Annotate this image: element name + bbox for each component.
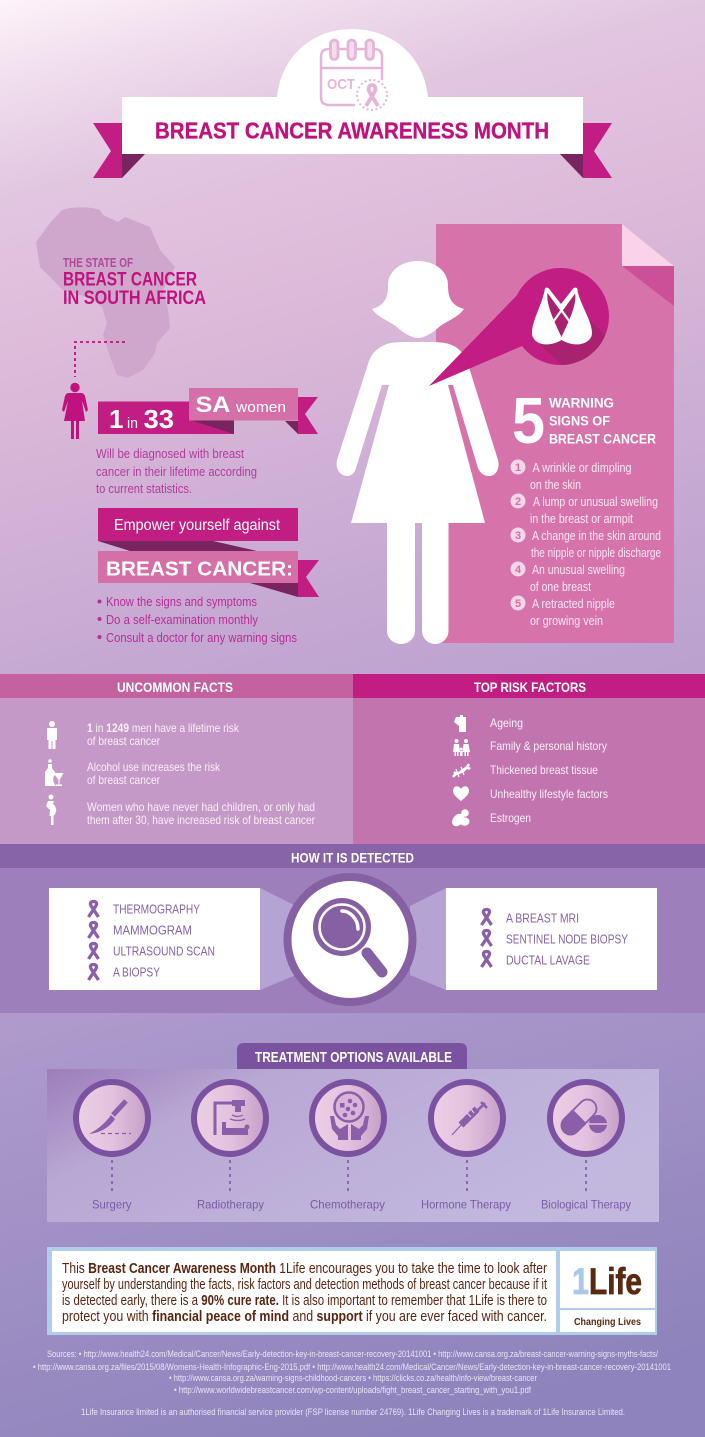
text: alcohol risk: Alcohol use increases the risk bbox=[87, 760, 221, 774]
text: diagnosis statistic bbox=[96, 446, 257, 496]
list: warning signs: or growing vein bbox=[530, 613, 603, 628]
text: message: is detected early, there is a 90% cure rate. It is also important to remember that 1Life is there to bbox=[62, 1293, 547, 1309]
ribbon: empower yourself bbox=[98, 508, 298, 551]
text: ageing: Ageing bbox=[490, 716, 523, 730]
treatment: biological therapy: Biological Therapy bbox=[541, 1198, 631, 1212]
heading: state of breast cancer bbox=[63, 255, 206, 309]
text: men risk bbox=[87, 721, 240, 748]
text: lifestyle: Unhealthy lifestyle factors bbox=[490, 787, 608, 801]
card: detection methods right bbox=[446, 888, 657, 990]
text: children risk: them after 30, have increased risk of breast cancer bbox=[87, 813, 315, 827]
text: sources: • http://www.cansa.org.za/warning-signs-childhood-cancers • https://clicks.co.za/health/info-view/breast-cancer bbox=[169, 1373, 537, 1383]
list: empower bullets: Consult a doctor for any warning signs bbox=[106, 630, 297, 645]
header banner bbox=[93, 29, 612, 178]
text: family history: Family & personal history bbox=[490, 739, 607, 753]
list: warning signs: in the breast or armpit bbox=[530, 511, 633, 526]
ribbon: breast cancer: BREAST CANCER: bbox=[106, 558, 293, 580]
list: warning signs: A retracted nipple bbox=[532, 596, 615, 611]
heading: state of breast cancer: IN SOUTH AFRICA bbox=[63, 288, 206, 309]
panel: how it is detected bbox=[0, 844, 705, 1013]
treatment: chemotherapy bbox=[310, 1082, 385, 1212]
card: detection methods right: A BREAST MRI bbox=[506, 910, 579, 926]
card: detection methods left bbox=[49, 888, 260, 990]
icon: man bbox=[47, 721, 57, 749]
right ribbon tail bbox=[560, 123, 612, 178]
list: empower bullets bbox=[98, 594, 297, 645]
ribbon: breast cancer bbox=[98, 551, 319, 597]
ribbon: 1 in 33 SA women bbox=[98, 388, 318, 434]
list: empower bullets: Know the signs and symptoms bbox=[106, 594, 257, 609]
panel: treatment options bbox=[47, 1043, 659, 1222]
text: message: This Breast Cancer Awareness Month 1Life encourages you to take the time to look after bbox=[62, 1261, 547, 1277]
text: diagnosis statistic: cancer in their lifetime according bbox=[96, 464, 257, 479]
card: detection methods left: MAMMOGRAM bbox=[113, 922, 192, 938]
logo: 1Life: 1 bbox=[572, 1261, 589, 1302]
treatment: surgery: Surgery bbox=[92, 1198, 132, 1212]
list: warning signs: 2 bbox=[515, 496, 521, 508]
list: warning signs: of one breast bbox=[530, 579, 591, 594]
heading: 5 warning signs: 5 bbox=[512, 384, 545, 457]
list: warning signs: 1 bbox=[515, 462, 521, 474]
list: warning signs: 4 bbox=[515, 564, 522, 576]
logo tagline: Changing Lives bbox=[574, 1317, 641, 1328]
list: warning signs: A change in the skin around bbox=[532, 528, 661, 543]
card: detection methods left: A BIOPSY bbox=[113, 964, 160, 980]
title: BREAST CANCER AWARENESS MONTH bbox=[155, 118, 549, 144]
card: detection methods left: ULTRASOUND SCAN bbox=[113, 944, 215, 958]
text: men risk: 1 in 1249 men have a lifetime risk bbox=[87, 721, 240, 735]
icon: magnifying glass bbox=[288, 877, 412, 1002]
icon: heart bbox=[453, 786, 469, 801]
list: warning signs: on the skin bbox=[530, 477, 581, 492]
text: diagnosis statistic: to current statistics. bbox=[96, 481, 192, 496]
ribbon: 1 in 33 SA women: SA bbox=[196, 392, 231, 417]
card: detection methods left: THERMOGRAPHY bbox=[113, 902, 200, 916]
connector wedges bbox=[260, 888, 296, 990]
heading: state of breast cancer: BREAST CANCER bbox=[63, 270, 197, 290]
treatment: biological therapy bbox=[541, 1082, 631, 1212]
ribbon: 1 in 33 SA women: in bbox=[127, 415, 138, 432]
callout: breast icon bubble bbox=[429, 268, 609, 386]
heading: uncommon facts: UNCOMMON FACTS bbox=[117, 679, 233, 695]
icon: alcohol bbox=[45, 759, 64, 786]
heading: 5 warning signs: SIGNS OF bbox=[549, 412, 610, 428]
text: men risk: of breast cancer bbox=[87, 734, 160, 748]
icon: pills bbox=[450, 809, 470, 829]
panel: top risk factors bbox=[353, 674, 705, 844]
treatment: radiotherapy bbox=[194, 1082, 266, 1212]
logo: 1Life: Life bbox=[589, 1261, 642, 1302]
text: diagnosis statistic: Will be diagnosed with breast bbox=[96, 446, 244, 461]
icon: pregnant woman bbox=[46, 794, 56, 825]
heading: 5 warning signs bbox=[512, 384, 656, 457]
text: sources bbox=[33, 1349, 671, 1395]
white dome and banner bbox=[122, 29, 583, 154]
list: warning signs: An unusual swelling bbox=[532, 562, 625, 577]
heading tab: treatment options: TREATMENT OPTIONS AVAILABLE bbox=[255, 1050, 452, 1066]
list: warning signs bbox=[510, 460, 661, 628]
figure: woman silhouette bbox=[337, 261, 499, 644]
list: warning signs: A wrinkle or dimpling bbox=[532, 460, 632, 475]
list: warning signs: 5 bbox=[515, 598, 521, 610]
map of Africa bbox=[36, 207, 175, 378]
dotted connector bbox=[75, 342, 125, 377]
icon: october calendar bbox=[321, 40, 387, 110]
icon: dna bbox=[453, 764, 470, 777]
text: children risk bbox=[87, 800, 315, 827]
heading: state of breast cancer: THE STATE OF bbox=[63, 255, 133, 270]
list: warning signs: 3 bbox=[515, 530, 521, 542]
card: detection methods right: DUCTAL LAVAGE bbox=[506, 952, 590, 968]
icon: october calendar: OCT bbox=[327, 76, 355, 93]
heading: 5 warning signs: WARNING bbox=[549, 394, 614, 410]
treatment: radiotherapy: Radiotherapy bbox=[197, 1198, 264, 1212]
text: thickened tissue: Thickened breast tissue bbox=[490, 763, 598, 777]
left ribbon tail bbox=[93, 123, 145, 178]
panel: warning signs page bbox=[436, 224, 674, 643]
heading tab: treatment options bbox=[237, 1043, 467, 1069]
panel: 1Life message bbox=[47, 1247, 657, 1335]
icon: woman bbox=[62, 383, 88, 439]
ribbon: 1 in 33 SA women: 1 bbox=[109, 404, 123, 434]
list: empower bullets: Do a self-examination monthly bbox=[106, 612, 258, 627]
text: alcohol risk: of breast cancer bbox=[87, 773, 160, 787]
icon: family bbox=[453, 739, 470, 756]
treatment: chemotherapy: Chemotherapy bbox=[310, 1198, 385, 1212]
text: estrogen: Estrogen bbox=[490, 811, 531, 825]
panel: uncommon facts bbox=[0, 674, 353, 844]
heading: top risk factors: TOP RISK FACTORS bbox=[474, 679, 586, 695]
text: alcohol risk bbox=[87, 760, 221, 787]
list: warning signs: A lump or unusual swelling bbox=[533, 494, 658, 509]
treatment: hormone therapy: Hormone Therapy bbox=[421, 1198, 511, 1212]
text: message: yourself by understanding the facts, risk factors and detection methods of breast cancer because if it bbox=[62, 1277, 547, 1293]
ribbon: 1 in 33 SA women: 33 bbox=[144, 404, 174, 434]
text: sources: • http://www.worldwidebreastcancer.com/wp-content/uploads/fight_breast_cancer_starting_with_you1.pdf bbox=[174, 1385, 531, 1395]
card: detection methods right: SENTINEL NODE BIOPSY bbox=[506, 932, 628, 946]
text: children risk: Women who have never had children, or only had bbox=[87, 800, 315, 814]
ribbon: 1 in 33 SA women: women bbox=[235, 399, 286, 416]
heading: 5 warning signs: BREAST CANCER bbox=[549, 430, 656, 446]
list: warning signs: the nipple or nipple discharge bbox=[531, 545, 661, 560]
text: message: protect you with financial peace of mind and support if you are ever faced with cancer. bbox=[62, 1309, 547, 1325]
treatment: hormone therapy bbox=[421, 1082, 511, 1212]
treatment: surgery bbox=[76, 1082, 148, 1212]
heading: how it is detected: HOW IT IS DETECTED bbox=[291, 850, 414, 866]
text: message bbox=[62, 1261, 547, 1325]
icon: ageing bbox=[454, 715, 466, 732]
logo: 1Life bbox=[572, 1261, 642, 1302]
ribbon: empower yourself: Empower yourself against bbox=[114, 517, 280, 534]
